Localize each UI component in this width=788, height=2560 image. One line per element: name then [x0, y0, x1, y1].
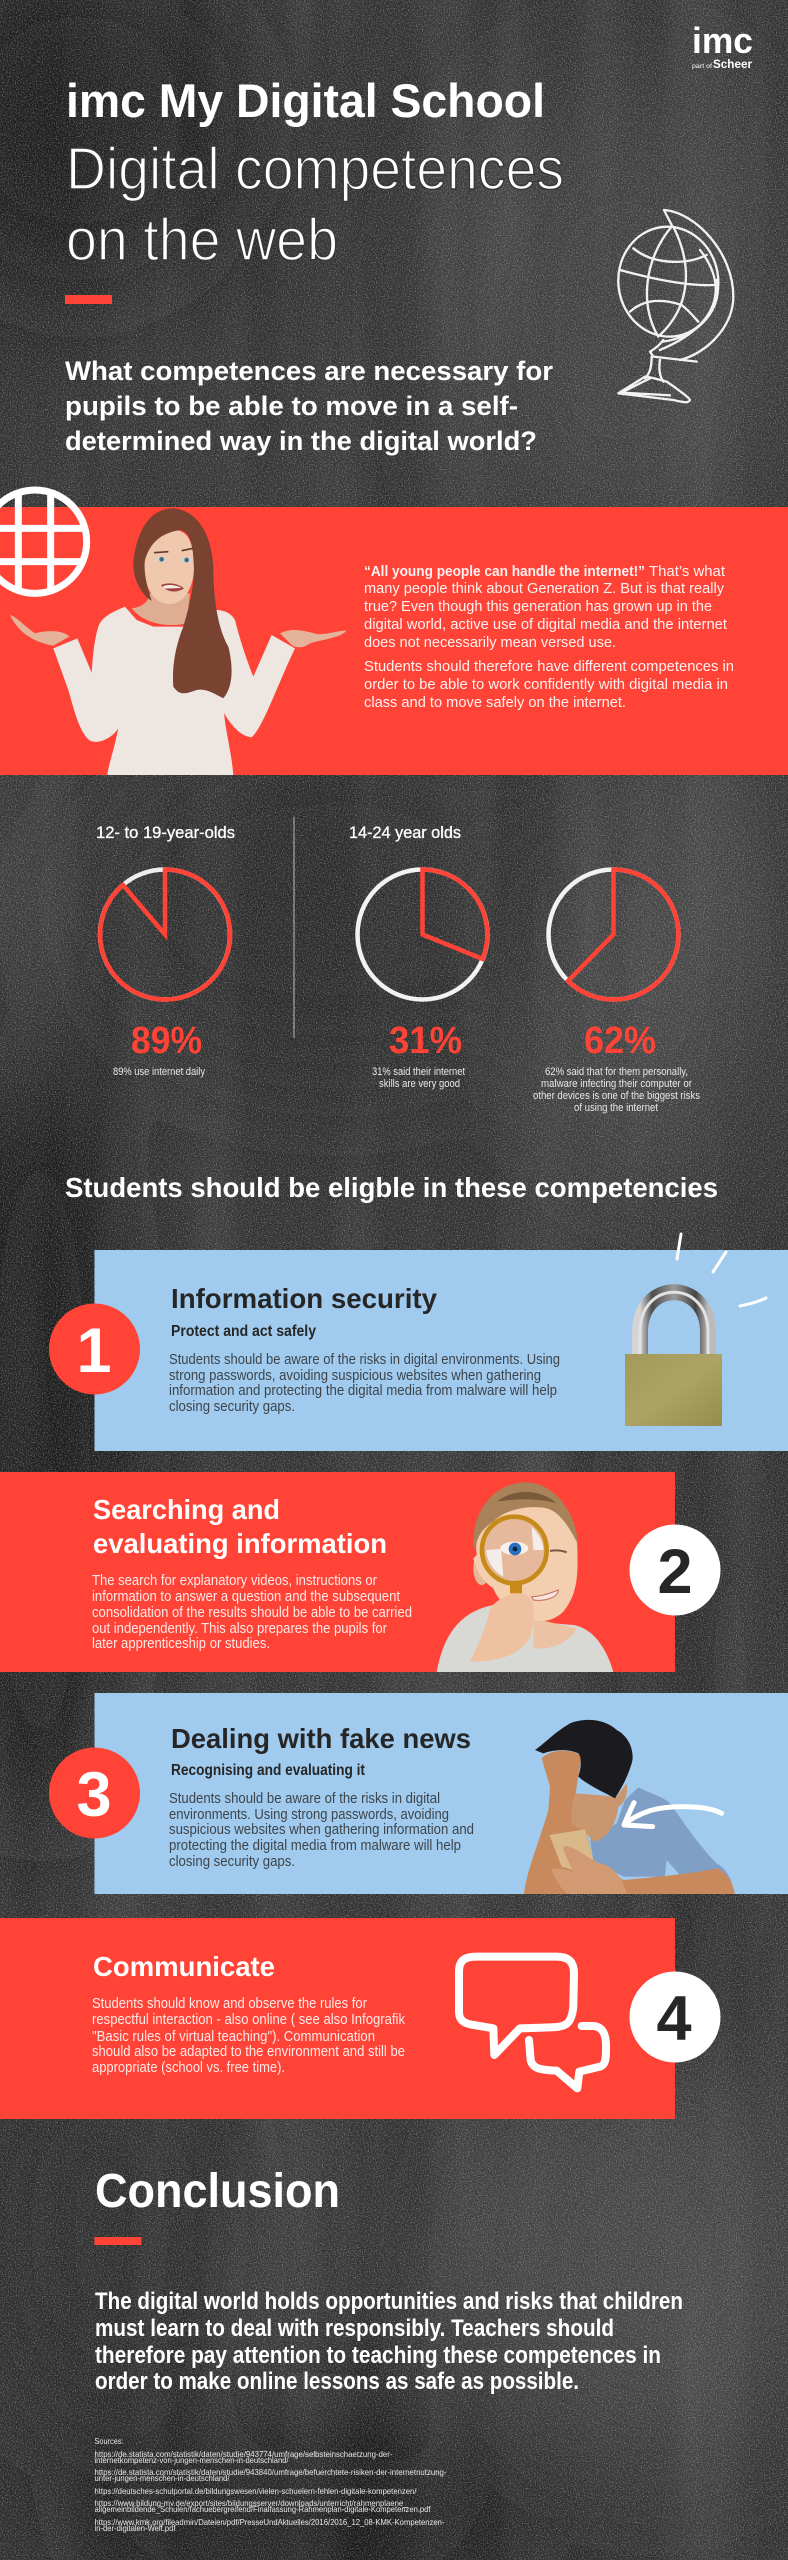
sources: https://de.statista.com/statistik/daten/studie/943774/umfrage/selbsteinschaetzung-der- [94, 2449, 393, 2459]
body text: closing security gaps. [169, 1399, 295, 1415]
body text: closing security gaps. [169, 1854, 295, 1870]
intro text: true? Even though this generation has grown up in the [364, 598, 712, 615]
body text: Students should be aware of the risks in digital environments. Using [169, 1352, 560, 1368]
heading: Searching and [93, 1494, 280, 1525]
photo: boy with magnifier [437, 1482, 613, 1672]
body text: protecting the digital media from malware will help [169, 1838, 461, 1854]
body text: Students should be aware of the risks in digital [169, 1791, 440, 1807]
body text: suspicious websites when gathering information and [169, 1822, 474, 1838]
question heading: What competences are necessary for [65, 356, 553, 386]
icon: padlock [625, 1292, 722, 1426]
arrow [624, 1803, 722, 1827]
number 3 [49, 1748, 140, 1838]
number 3: 3 [76, 1760, 112, 1830]
sources: https://www.kmk.org/fileadmin/Dateien/pdf/PresseUndAktuelles/2016/2016_12_08-KMK-Kompetenzen- [94, 2517, 445, 2527]
body text: Students should know and observe the rules for [92, 1996, 367, 2012]
intro text: That’s what [649, 563, 726, 580]
question heading [65, 356, 553, 456]
competencies heading: Students should be eligble in these competencies [65, 1172, 718, 1203]
pie chart 31% [358, 870, 488, 1000]
intro text: class and to move safely on the internet. [364, 694, 626, 711]
body text [169, 1352, 560, 1415]
pie chart 89% [100, 869, 230, 1000]
icon: web globe [0, 490, 87, 593]
logo: part of [692, 64, 712, 70]
photo: shrugging girl [10, 508, 347, 775]
body text: strong passwords, avoiding suspicious websites when gathering [169, 1368, 541, 1384]
intro text: “All young people can handle the internet!” [364, 563, 645, 580]
body text: out independently. This also prepares the pupils for [92, 1621, 387, 1637]
caption 31%: 31% said their internet [372, 1066, 465, 1078]
number 4 [630, 1972, 720, 2062]
caption 62%: malware infecting their computer or [541, 1078, 692, 1090]
sources: https://deutsches-schulportal.de/bildungswesen/vielen-schuelern-fehlen-digitale-kompetenzen/ [94, 2486, 417, 2496]
body text: environments. Using strong passwords, avoiding [169, 1807, 449, 1823]
number 2: 2 [657, 1537, 693, 1607]
panel: competence 3 fake news [49, 1693, 788, 1894]
subheading: Recognising and evaluating it [171, 1762, 366, 1779]
conclusion accent bar [94, 2237, 142, 2245]
body text: information and protecting the digital media from malware will help [169, 1383, 557, 1399]
heading: evaluating information [93, 1528, 387, 1559]
caption 62%: other devices is one of the biggest risks [533, 1090, 700, 1102]
sources [94, 2436, 447, 2533]
conclusion text: The digital world holds opportunities and risks that children [95, 2288, 683, 2315]
number 1: 1 [76, 1316, 112, 1386]
icon: chalk globe [613, 210, 733, 402]
panel: competence 2 searching [0, 1472, 720, 1672]
title: Digital competences [66, 136, 564, 202]
conclusion text [95, 2288, 683, 2395]
heading: Communicate [93, 1951, 275, 1982]
heading [93, 1494, 387, 1559]
number 4: 4 [656, 1984, 692, 2054]
chalk sparkle lines [677, 1234, 766, 1306]
stat value 31%: 31% [389, 1020, 462, 1062]
sources: Sources: [94, 2436, 124, 2446]
caption 31%: skills are very good [379, 1078, 460, 1090]
stat value 62%: 62% [584, 1020, 656, 1062]
question heading: pupils to be able to move in a self- [65, 391, 518, 421]
sources: https://www.bildung-mv.de/export/sites/bildungsserver/downloads/unterricht/rahmenplaene_ [94, 2498, 408, 2508]
number 2 [630, 1524, 720, 1616]
photo: boy with phone [524, 1720, 735, 1894]
conclusion text: therefore pay attention to teaching these competences in [95, 2342, 661, 2369]
conclusion heading: Conclusion [95, 2165, 340, 2218]
body text: respectful interaction - also online ( see also Infografik [92, 2012, 406, 2028]
age group label 14-24: 14-24 year olds [349, 824, 461, 842]
intro text: does not necessarily mean versed use. [364, 634, 616, 651]
conclusion text: order to make online lessons as safe as possible. [95, 2368, 579, 2395]
body text: information to answer a question and the subsequent [92, 1589, 400, 1605]
body text [92, 1996, 406, 2076]
body text: consolidation of the results should be able to be carried [92, 1605, 412, 1621]
caption 62%: of using the internet [574, 1102, 658, 1114]
body text [92, 1573, 412, 1652]
sources: internetkompetenz-von-jungen-menschen-in-deutschland/ [94, 2455, 289, 2465]
subheading: Protect and act safely [171, 1323, 316, 1340]
panel: competence 1 information security [49, 1234, 788, 1451]
title: imc My Digital School [66, 74, 545, 127]
title [66, 74, 564, 273]
intro text: Students should therefore have different competences in [364, 658, 734, 675]
title accent bar [65, 295, 112, 304]
caption 89%: 89% use internet daily [113, 1066, 205, 1078]
body text: "Basic rules of virtual teaching"). Communication [92, 2029, 375, 2045]
intro text [364, 563, 734, 711]
body text: The search for explanatory videos, instructions or [92, 1573, 377, 1589]
title: on the web [66, 207, 338, 273]
body text: should also be adapted to the environment and still be [92, 2044, 405, 2060]
icon: speech bubbles [459, 1957, 606, 2088]
conclusion text: must learn to deal with responsibly. Teachers should [95, 2315, 614, 2342]
pie chart 62% [548, 870, 678, 1000]
sources: allgemeinbildende_Schulen/fachuebergreifend/Finalfassung-Rahmenplan-digitale-Kompetenzen.pdf [94, 2504, 431, 2514]
body text: appropriate (school vs. free time). [92, 2060, 285, 2076]
sources: in-der-digitalen-Welt.pdf [94, 2523, 176, 2533]
body text [169, 1791, 474, 1870]
panel: statistics [96, 817, 700, 1114]
panel: competence 4 communicate [0, 1918, 720, 2119]
logo: imc [692, 20, 753, 61]
stat value 89%: 89% [131, 1020, 202, 1062]
logo: Scheer [713, 57, 752, 71]
question heading: determined way in the digital world? [65, 426, 537, 456]
age group label 12-19: 12- to 19-year-olds [96, 824, 235, 842]
number 1 [49, 1304, 140, 1394]
panel: intro [0, 490, 788, 775]
body text: later apprenticeship or studies. [92, 1636, 270, 1652]
intro text: digital world, active use of digital media and the internet [364, 616, 728, 633]
intro text: many people think about Generation Z. But is that really [364, 580, 724, 597]
intro text: order to be able to work confidently with digital media in [364, 676, 728, 693]
sources: unter-jungen-menschen-in-deutschland/ [94, 2473, 230, 2483]
caption 62%: 62% said that for them personally, [545, 1066, 688, 1078]
heading: Information security [171, 1283, 437, 1314]
caption 62% [533, 1066, 700, 1114]
sources: https://de.statista.com/statistik/daten/studie/943840/umfrage/befuerchtete-risiken-der-internetnutzung- [94, 2467, 447, 2477]
heading: Dealing with fake news [171, 1723, 471, 1754]
caption 31% [372, 1066, 465, 1090]
